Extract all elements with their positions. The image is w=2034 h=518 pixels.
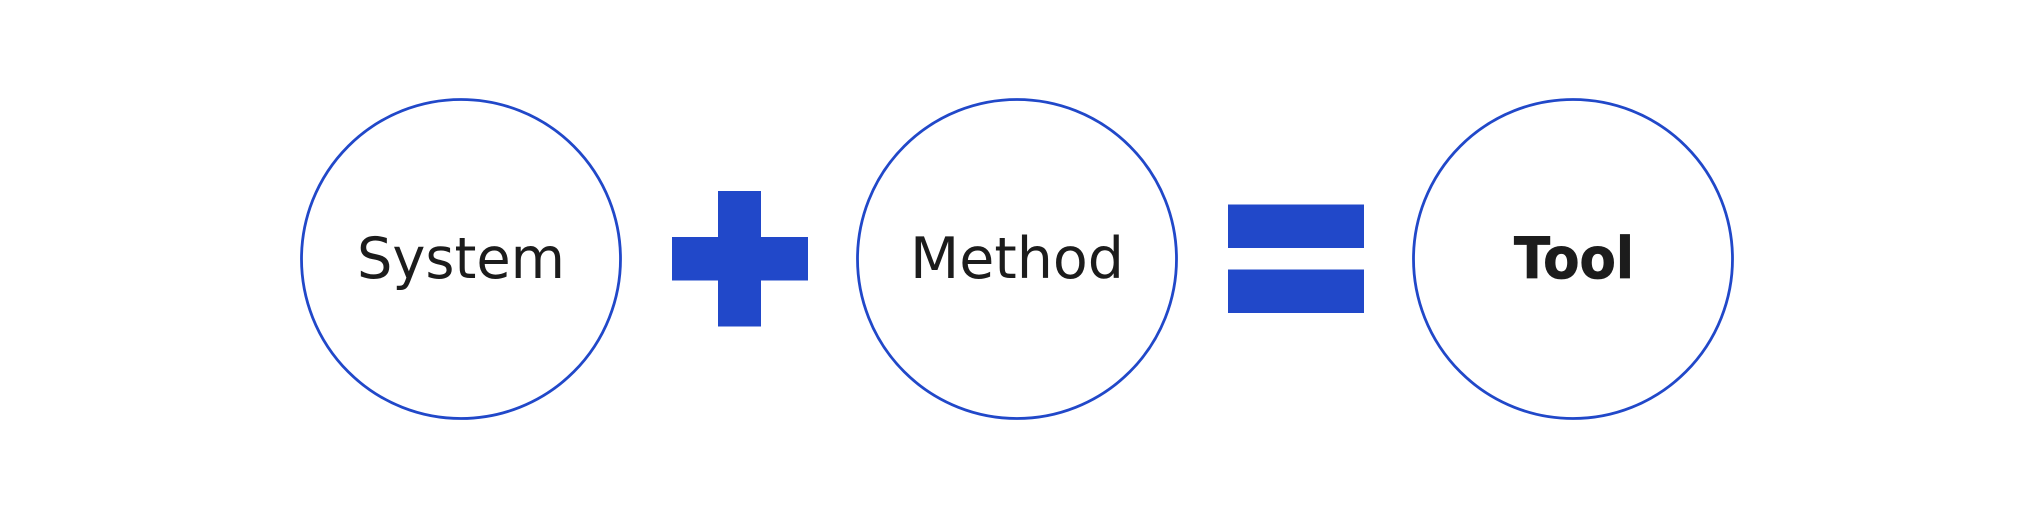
- label: System: System: [357, 226, 565, 292]
- icon: equals sign: [1228, 204, 1364, 313]
- label: Tool: Tool: [1514, 226, 1634, 292]
- label: Method: Method: [910, 226, 1124, 292]
- circle: Tool: [1414, 100, 1732, 418]
- icon: plus sign: [672, 191, 808, 326]
- circle: Method: [858, 100, 1176, 418]
- circle: System: [302, 100, 620, 418]
